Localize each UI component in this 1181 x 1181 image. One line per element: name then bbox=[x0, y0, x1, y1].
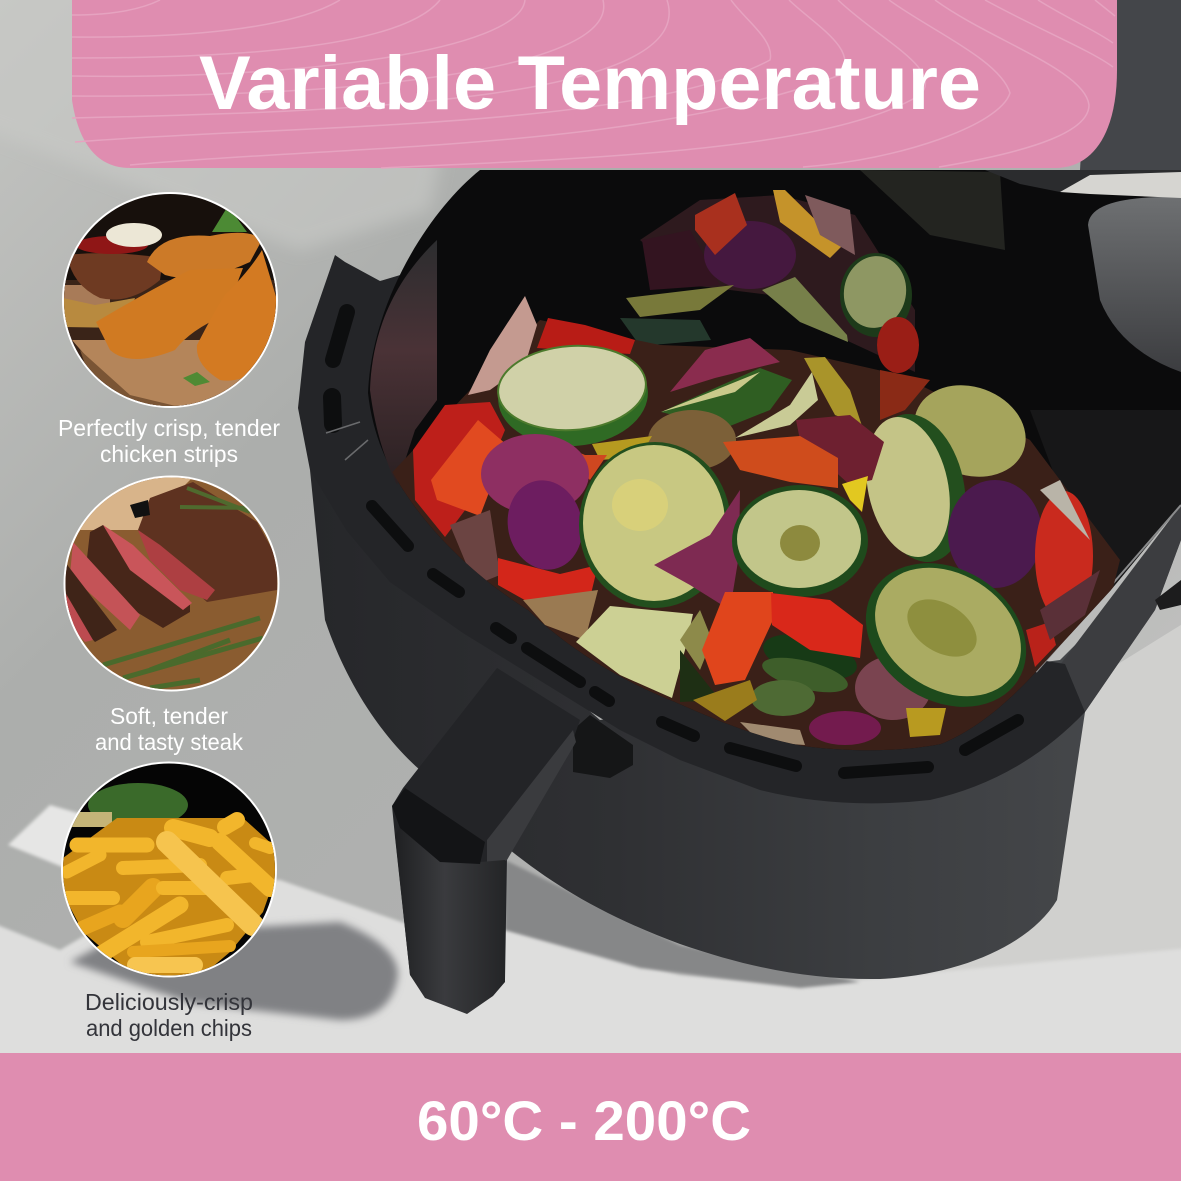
air fryer basket bbox=[298, 0, 1181, 979]
rim slots bbox=[332, 312, 1018, 773]
appliance body top right bbox=[985, 0, 1181, 198]
zucchini: right oval bbox=[866, 414, 965, 562]
temperature range: 60°C - 200°C bbox=[417, 1089, 751, 1152]
appliance foot bbox=[1155, 580, 1181, 610]
caption: chicken strips: Perfectly crisp, tender bbox=[58, 415, 280, 441]
interior right wall bbox=[1030, 410, 1181, 591]
onion and pepper centre right bbox=[723, 415, 1093, 621]
red peppers and onions left bbox=[431, 420, 607, 640]
basket right side panel bbox=[1060, 505, 1181, 712]
food circle: steak bbox=[60, 470, 285, 695]
caption: chicken strips bbox=[58, 415, 280, 467]
title: Variable Temperature bbox=[199, 41, 981, 126]
caption: steak: Soft, tender bbox=[110, 703, 228, 729]
zucchini: top left slice bbox=[497, 344, 648, 446]
basket outer body bbox=[310, 470, 1181, 979]
caption: chips: Deliciously-crisp bbox=[85, 989, 253, 1015]
food circle: chicken strips bbox=[60, 190, 280, 410]
top banner bbox=[72, 0, 1117, 168]
zucchini: lower right slice bbox=[866, 563, 1026, 707]
lower vegetables bbox=[576, 570, 1100, 745]
inner lid reflection bbox=[860, 170, 1181, 372]
food circle: chips bbox=[55, 760, 285, 985]
caption: steak: and tasty steak bbox=[95, 729, 243, 755]
vegetables in basket bbox=[385, 190, 1120, 770]
basket rim bbox=[298, 255, 1085, 803]
rim ribs bbox=[326, 422, 368, 460]
caption: chips bbox=[85, 989, 253, 1041]
food base bbox=[385, 320, 1120, 770]
onions and peppers behind bbox=[413, 296, 1039, 537]
back layer bbox=[620, 190, 919, 373]
zucchini: big slice bbox=[579, 442, 740, 610]
interior left wall bbox=[370, 240, 437, 485]
caption: chips: and golden chips bbox=[86, 1015, 252, 1041]
caption: chicken strips: chicken strips bbox=[100, 441, 238, 467]
basket interior bbox=[368, 170, 1181, 750]
bottom banner bbox=[0, 1053, 1181, 1181]
handle bbox=[392, 668, 633, 1014]
caption: steak bbox=[95, 703, 243, 755]
zucchini: round slice bbox=[732, 485, 868, 597]
